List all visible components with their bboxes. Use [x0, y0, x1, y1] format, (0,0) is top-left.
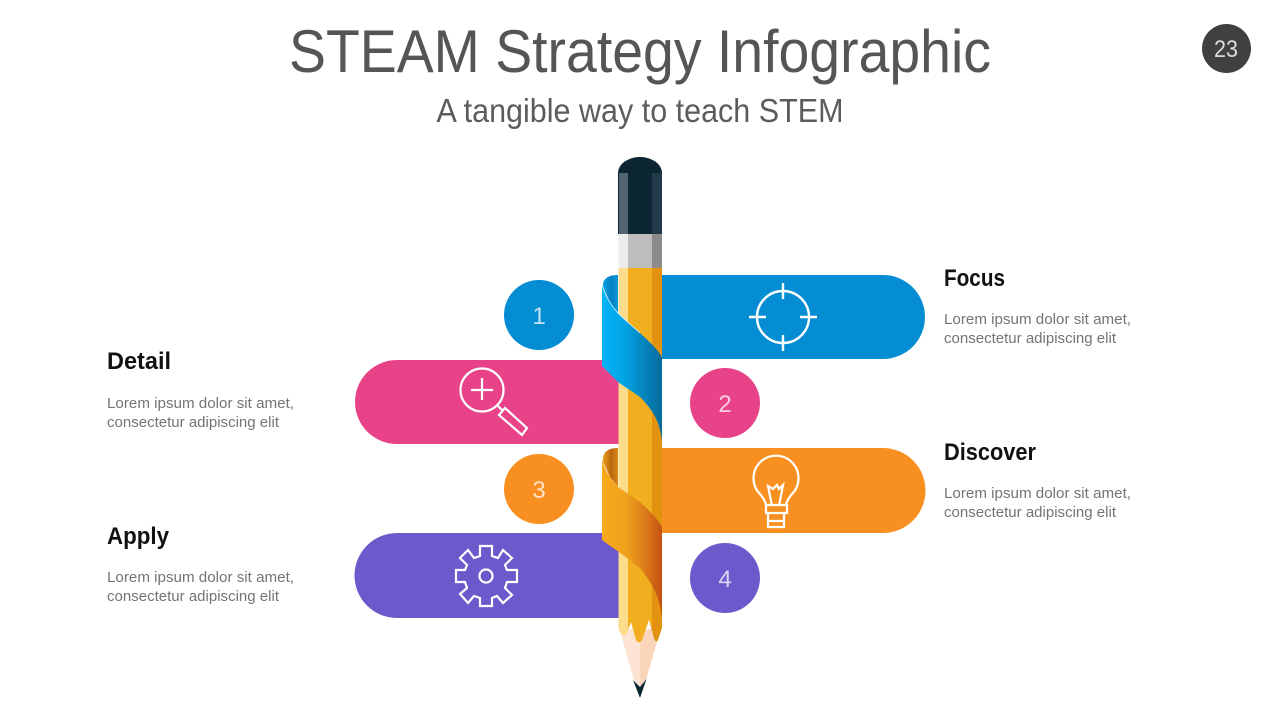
text block: Focus — [944, 265, 1131, 347]
icon: gear — [456, 546, 517, 606]
page number badge: 23 — [1214, 36, 1238, 63]
text block: Apply: Apply — [107, 523, 170, 550]
text block: Detail — [107, 348, 294, 431]
text block: Discover: Discover — [944, 439, 1036, 466]
number circle 2 — [690, 368, 760, 438]
bar: pink detail — [355, 360, 640, 444]
text block: Apply — [107, 523, 294, 605]
page number badge — [1202, 24, 1251, 73]
pencil body — [618, 268, 662, 642]
ribbon inner curl — [603, 275, 618, 316]
number circle 2: 2 — [718, 391, 732, 418]
text block: Discover: Lorem ipsum dolor sit amet, — [944, 485, 1131, 502]
text block: Focus: Focus — [944, 265, 1005, 292]
icon: crosshair target — [749, 283, 817, 351]
pencil eraser cap — [618, 157, 662, 234]
title: STEAM Strategy Infographic — [289, 18, 991, 85]
blue ribbon — [602, 275, 662, 441]
number circle 1 — [504, 280, 574, 350]
number circle 1: 1 — [532, 303, 546, 330]
text block: Apply: Lorem ipsum dolor sit amet, — [107, 569, 294, 586]
text block: Apply: consectetur adipiscing elit — [107, 588, 280, 605]
text block: Detail: Lorem ipsum dolor sit amet, — [107, 395, 294, 412]
number circle 4 — [690, 543, 760, 613]
pencil lead — [633, 679, 646, 698]
bar: blue focus — [640, 275, 925, 359]
text block: Detail: consectetur adipiscing elit — [107, 414, 280, 431]
text block: Discover — [944, 439, 1131, 521]
bar: purple apply — [355, 533, 640, 618]
icon: magnifying glass — [460, 368, 527, 435]
ribbon front band — [602, 286, 662, 441]
ribbon inner curl — [603, 448, 618, 487]
pencil metal band — [618, 234, 662, 268]
ribbon front band — [602, 460, 662, 618]
text block: Discover: consectetur adipiscing elit — [944, 504, 1117, 521]
text block: Focus: Lorem ipsum dolor sit amet, — [944, 311, 1131, 328]
number circle 4: 4 — [718, 566, 732, 593]
pencil tip wood — [619, 628, 661, 687]
text block: Detail: Detail — [107, 348, 171, 375]
orange ribbon — [602, 448, 662, 618]
number circle 3 — [504, 454, 574, 524]
number circle 3: 3 — [532, 477, 546, 504]
icon: light bulb — [754, 456, 799, 527]
pencil — [618, 157, 662, 698]
bar: orange discover — [640, 448, 926, 533]
ribbon highlight edge — [603, 287, 640, 333]
subtitle: A tangible way to teach STEM — [436, 92, 844, 129]
text block: Focus: consectetur adipiscing elit — [944, 330, 1117, 347]
